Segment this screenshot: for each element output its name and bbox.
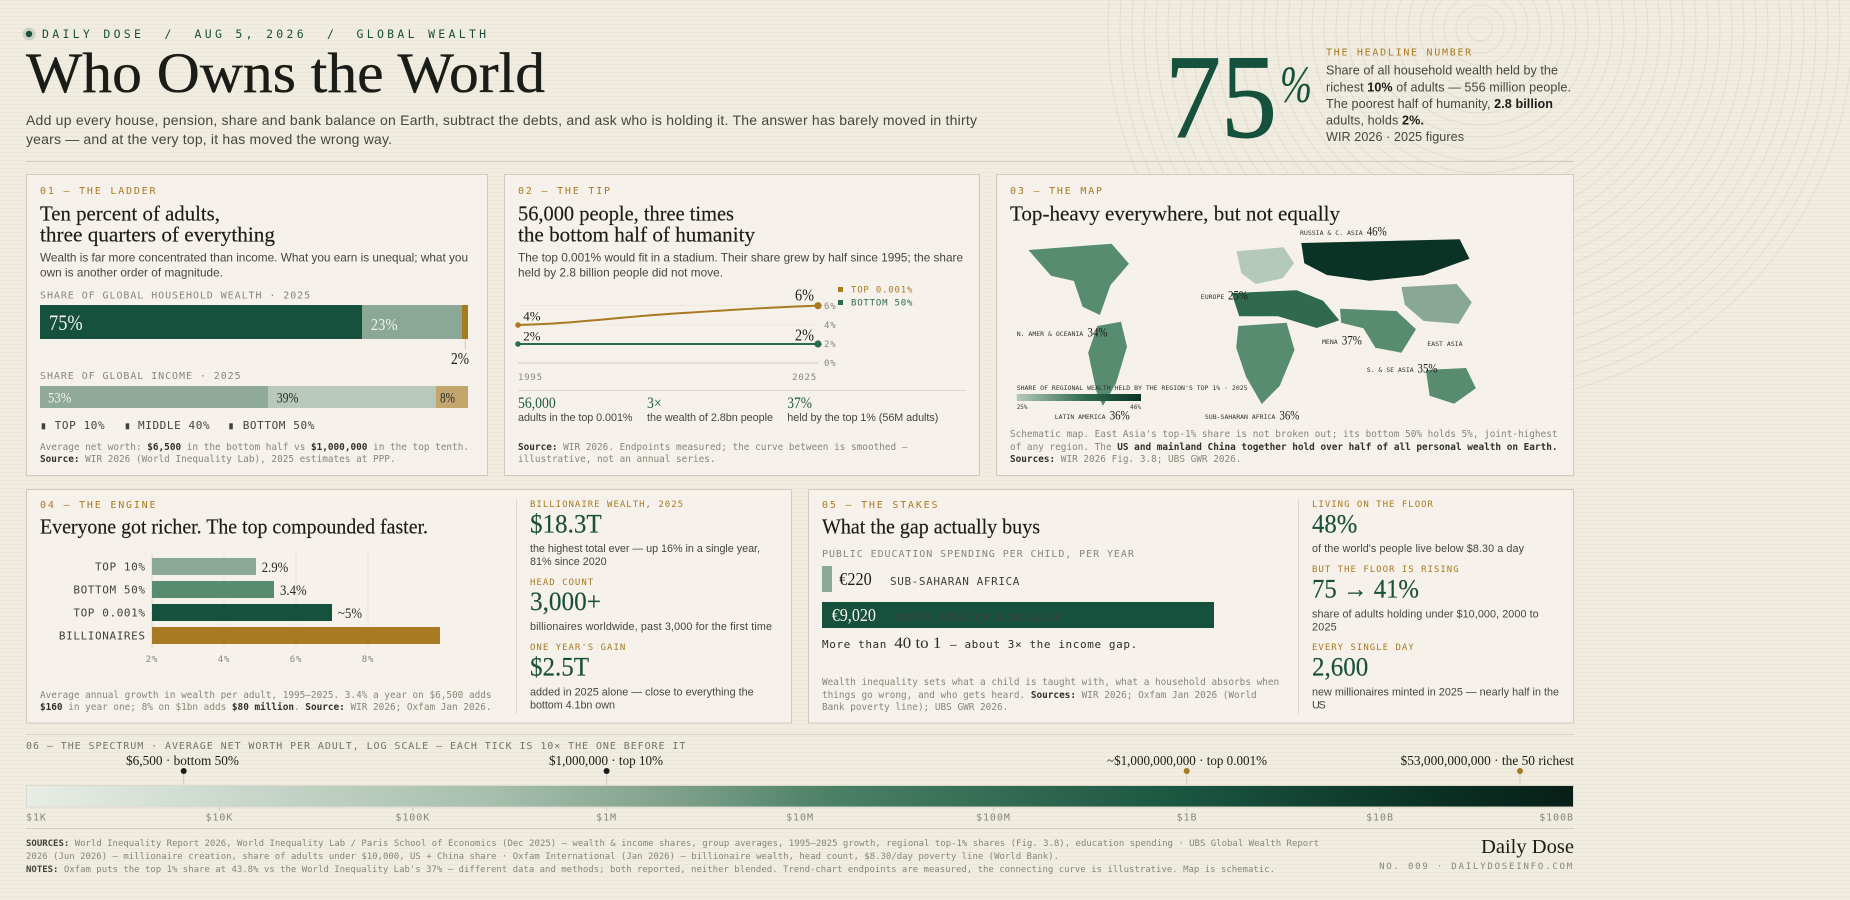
marker: top 10% [549, 753, 663, 785]
headline explanation: Share of all household wealth held by the [1326, 64, 1558, 78]
headline number 75%: 75 [1165, 30, 1277, 163]
marker: top 0.001% [1107, 753, 1267, 785]
intro text [26, 112, 977, 147]
stat: billionaire wealth [530, 500, 760, 568]
stat: one year's gain: added in 2025 alone — close to everything the [530, 687, 754, 699]
growth bar chart: 2.9% [262, 560, 288, 576]
map labels: 36% [1110, 407, 1130, 422]
education spending bars: SUB-SAHARAN AFRICA [890, 575, 1020, 588]
panel heading: the bottom half of humanity [518, 222, 756, 246]
sources and notes [26, 839, 1319, 875]
stat: one year's gain: bottom 4.1bn own [530, 699, 615, 711]
chart legend [838, 286, 913, 308]
stat: living on the floor: 48% [1312, 510, 1357, 539]
stat: head count: billionaires worldwide, past 3,000 for the first time [530, 621, 772, 633]
education spending bars: €220 [839, 569, 872, 589]
headline explanation: The poorest half of humanity, 2.8 billion [1326, 97, 1553, 111]
panel label: 05 — THE STAKES [822, 500, 939, 511]
panel heading [40, 202, 275, 246]
panel note: illustrative, not an annual series. [518, 454, 716, 465]
masthead eyebrow: / [327, 27, 337, 41]
scale ticks: $10K [205, 812, 233, 824]
stat: every single day: 2,600 [1312, 653, 1368, 682]
scale ticks: $100M [976, 812, 1011, 824]
scale ticks: $10B [1366, 812, 1394, 824]
panel: 01 the ladder [26, 174, 488, 476]
map labels: EUROPE [1201, 293, 1224, 301]
headline explanation [1326, 48, 1571, 144]
marker: bottom 50%: $6,500 · bottom 50% [126, 753, 239, 768]
stat: 56,000: 56,000 [518, 395, 556, 412]
stat: one year's gain: $2.5T [530, 653, 589, 682]
panel: 04 the engine [26, 490, 792, 723]
spectrum heading: 06 — THE SPECTRUM · AVERAGE NET WORTH PER ADULT, LOG SCALE — EACH TICK IS 10× THE ONE BEFORE IT [26, 741, 686, 752]
stat: every single day: EVERY SINGLE DAY [1312, 643, 1415, 653]
education spending bars [822, 566, 1214, 628]
headline explanation: richest 10% of adults — 556 million people. [1326, 80, 1571, 94]
stat: head count [530, 578, 772, 633]
line chart: top 0.001% vs bottom 50%: 4% [824, 321, 836, 331]
headline explanation: THE HEADLINE NUMBER [1326, 48, 1473, 58]
growth bar chart: TOP 0.001% [73, 606, 146, 620]
sources and notes: NOTES: Oxfam puts the top 1% share at 43.8% vs the World Inequality Lab's 37% — different data and methods; both reported, neither blended. Trend-chart endpoints are measured, the connecting curve is illustrative. Map is schematic. [26, 865, 1275, 875]
stat: 37%: 37% [787, 395, 812, 412]
gradient bar [26, 786, 1574, 807]
panel description: The top 0.001% would fit in a stadium. Their share grew by half since 1995; the share [518, 250, 963, 264]
scale ticks: $1M [596, 812, 617, 824]
line chart: top 0.001% vs bottom 50%: 2% [824, 340, 836, 350]
panel note [40, 690, 492, 713]
panel note: things go wrong, and who gets heard. Sources: WIR 2026; Oxfam Jan 2026 (World [822, 690, 1257, 701]
map labels: RUSSIA & C. ASIA [1300, 229, 1363, 237]
stat: 3x [647, 395, 773, 424]
growth bar chart [59, 554, 440, 665]
income share stacked bar [40, 386, 468, 408]
income share stacked bar: 8% [440, 390, 455, 406]
marker: top 10%: $1,000,000 · top 10% [549, 753, 663, 768]
sources and notes: SOURCES: World Inequality Report 2026, World Inequality Lab / Paris School of Economics (Dec 2025) — wealth & income shares, group averages, 1995–2025 growth, regional top-1% shares (Fig. 3.8), education spending · UBS Global Wealth Report [26, 839, 1319, 849]
stat: head count: HEAD COUNT [530, 578, 594, 588]
panel description: held by 2.8 billion people did not move. [518, 266, 723, 280]
marker: top 0.001%: ~$1,000,000,000 · top 0.001% [1107, 753, 1267, 768]
education spending bars: €9,020 [832, 605, 876, 625]
line chart: top 0.001% vs bottom 50% [515, 286, 836, 383]
income share stacked bar: 39% [277, 390, 298, 406]
line chart: top 0.001% vs bottom 50%: 2% [795, 326, 814, 345]
panel note: Source: WIR 2026. Endpoints measured; the curve between is smoothed — [518, 442, 908, 453]
wealth share stacked bar: 2% [451, 349, 469, 368]
masthead eyebrow: AUG 5, 2026 [194, 27, 307, 41]
map labels: 34% [1088, 324, 1108, 339]
panel label: 04 — THE ENGINE [40, 500, 157, 511]
masthead eyebrow: GLOBAL WEALTH [356, 27, 489, 41]
scale ticks: $1K [26, 812, 47, 824]
panel note: Wealth inequality sets what a child is taught with, what a household absorbs when [822, 677, 1279, 688]
map colour legend: SHARE OF REGIONAL WEALTH HELD BY THE REGION'S TOP 1% · 2025 [1017, 384, 1248, 392]
bar legend: BOTTOM 50% [243, 419, 315, 432]
stat: 56,000: adults in the top 0.001% [518, 412, 633, 424]
stat: living on the floor [1312, 500, 1525, 555]
footer brand: Daily Dose [1481, 836, 1574, 858]
stat: floor is rising [1312, 565, 1539, 633]
stat: billionaire wealth: 81% since 2020 [530, 556, 607, 568]
panel description: own is another order of magnitude. [40, 266, 223, 280]
panel note [518, 442, 908, 465]
map labels: S. & SE ASIA [1367, 366, 1414, 374]
stat: 3x: 3× [647, 395, 662, 412]
panel note: of any region. The US and mainland China together hold over half of all personal wealth on Earth. [1010, 442, 1558, 453]
stat: every single day [1312, 643, 1559, 711]
panel note: Schematic map. East Asia's top-1% share is not broken out; its bottom 50% holds 5%, joint-highest [1010, 429, 1558, 440]
title: Who Owns the World [26, 42, 545, 105]
line chart: top 0.001% vs bottom 50%: 6% [824, 302, 836, 312]
line chart: top 0.001% vs bottom 50%: 4% [523, 309, 541, 324]
stat: floor is rising: 2025 [1312, 621, 1337, 633]
map labels: 37% [1342, 332, 1362, 347]
stat: 3x: the wealth of 2.8bn people [647, 412, 773, 424]
map labels: 35% [1418, 360, 1438, 375]
growth bar chart: BILLIONAIRES [59, 630, 146, 642]
panel heading: 56,000 people, three times [518, 202, 734, 226]
panel note [1010, 429, 1558, 465]
intro text: Add up every house, pension, share and bank balance on Earth, subtract the debts, and ask who is holding it. The answer has barely moved in thirty [26, 112, 977, 128]
map labels: EAST ASIA [1427, 340, 1463, 348]
scale ticks: $10M [786, 812, 814, 824]
stat: living on the floor: LIVING ON THE FLOOR [1312, 500, 1434, 510]
panel heading [518, 202, 756, 246]
chart legend: TOP 0.001% [851, 286, 913, 296]
stat: floor is rising: share of adults holding under $10,000, 2000 to [1312, 609, 1539, 621]
growth bar chart: TOP 10% [95, 560, 146, 574]
marker: bottom 50% [126, 753, 239, 785]
masthead eyebrow: / [164, 27, 175, 41]
map colour legend: 25% [1017, 404, 1028, 411]
panel heading: Top-heavy everywhere, but not equally [1010, 202, 1340, 226]
growth bar chart: BOTTOM 50% [73, 584, 146, 596]
panel heading: Everyone got richer. The top compounded faster. [40, 514, 428, 538]
footer brand: NO. 009 · DAILYDOSEINFO.COM [1379, 862, 1574, 872]
education spending bars: NORTH AMERICA & OCEANIA [896, 611, 1062, 624]
map labels: MENA [1322, 338, 1338, 346]
map labels: 46% [1367, 223, 1387, 238]
stat: 37%: held by the top 1% (56M adults) [787, 412, 938, 424]
line chart: top 0.001% vs bottom 50%: 0% [824, 359, 836, 369]
scale ticks: $100B [1539, 812, 1574, 824]
panel label: 02 — THE TIP [518, 186, 612, 197]
education spending label: PUBLIC EDUCATION SPENDING PER CHILD, PER YEAR [822, 549, 1135, 560]
intro text: years — and at the very top, it has moved the wrong way. [26, 131, 392, 147]
ratio callout: — about 3× the income gap. [950, 638, 1138, 651]
footer brand [1379, 836, 1574, 872]
panel: 02 the tip [504, 174, 980, 476]
panel note: Sources: WIR 2026 Fig. 3.8; UBS GWR 2026. [1010, 454, 1241, 465]
panel heading: Ten percent of adults, [40, 202, 220, 226]
income bar label: SHARE OF GLOBAL INCOME · 2025 [40, 371, 242, 382]
marker: the 50 richest [1400, 753, 1574, 785]
stat: every single day: new millionaires minted in 2025 — nearly half in the [1312, 687, 1559, 699]
panel description [40, 250, 468, 280]
ratio callout: 40 to 1 [894, 635, 941, 652]
panel note: Bank poverty line); UBS GWR 2026. [822, 702, 1008, 713]
headline explanation: WIR 2026 · 2025 figures [1326, 130, 1464, 144]
panel note [822, 677, 1279, 713]
growth bar chart: 2% [146, 655, 158, 665]
panel note: Source: WIR 2026 (World Inequality Lab), 2025 estimates at PPP. [40, 454, 396, 465]
bar legend: MIDDLE 40% [138, 419, 210, 432]
schematic world map [1028, 239, 1476, 406]
stat: one year's gain: ONE YEAR'S GAIN [530, 643, 626, 653]
wealth share stacked bar [40, 305, 469, 368]
panel note: $160 in year one; 8% on $1bn adds $80 million. Source: WIR 2026; Oxfam Jan 2026. [40, 702, 492, 713]
panel description: Wealth is far more concentrated than income. What you earn is unequal; what you [40, 250, 468, 264]
bar legend [42, 419, 315, 432]
panel heading: three quarters of everything [40, 222, 275, 246]
scale ticks: $100K [395, 812, 430, 824]
stat: every single day: US [1312, 699, 1326, 711]
masthead eyebrow: DAILY DOSE [42, 27, 144, 41]
line chart: top 0.001% vs bottom 50%: 2025 [792, 373, 817, 383]
panel description [518, 250, 963, 280]
chart legend: BOTTOM 50% [851, 298, 913, 308]
headline explanation: adults, holds 2%. [1326, 114, 1424, 128]
growth bar chart: 4% [218, 655, 230, 665]
map colour legend [1017, 384, 1248, 411]
sources and notes: 2026 (Jun 2026) — millionaire creation, share of adults under $10,000, US + China share · Oxfam International (Jan 2026) — billionaire wealth, head count, $8.30/day poverty line (World Bank). [26, 852, 1059, 862]
panel note: Average net worth: $6,500 in the bottom half vs $1,000,000 in the top tenth. [40, 442, 469, 453]
map labels: 25% [1228, 287, 1248, 302]
panel: 05 the stakes [808, 490, 1574, 723]
bar legend: TOP 10% [55, 419, 105, 432]
line chart: top 0.001% vs bottom 50%: 2% [523, 329, 541, 344]
ratio callout: More than [822, 638, 887, 651]
map labels: N. AMER & OCEANIA [1017, 330, 1083, 338]
stat: billionaire wealth: $18.3T [530, 510, 602, 539]
map labels: LATIN AMERICA [1055, 413, 1106, 421]
map colour legend: 46% [1130, 404, 1141, 411]
scale ticks [26, 807, 1574, 824]
line chart: top 0.001% vs bottom 50%: 1995 [518, 373, 543, 383]
wealth share stacked bar: 23% [371, 315, 398, 334]
stat: billionaire wealth: the highest total ever — up 16% in a single year, [530, 543, 760, 555]
spectrum scale [26, 753, 1574, 824]
stat: floor is rising: BUT THE FLOOR IS RISING [1312, 565, 1460, 575]
stat: 56,000 [518, 395, 633, 424]
panel note: Average annual growth in wealth per adult, 1995–2025. 3.4% a year on $6,500 adds [40, 690, 492, 701]
stat: floor is rising: 75 → 41% [1312, 574, 1419, 603]
growth bar chart: 3.4% [280, 583, 307, 599]
wealth share stacked bar: 75% [49, 310, 83, 335]
stat: living on the floor: of the world's people live below $8.30 a day [1312, 543, 1525, 555]
line chart: top 0.001% vs bottom 50%: 6% [795, 286, 814, 305]
stat: billionaire wealth: BILLIONAIRE WEALTH, 2025 [530, 500, 684, 510]
panel note [40, 442, 469, 465]
marker: the 50 richest: $53,000,000,000 · the 50 richest [1400, 753, 1574, 768]
stat: head count: 3,000+ [530, 587, 601, 616]
income share stacked bar: 53% [48, 390, 71, 406]
panel label: 01 — THE LADDER [40, 186, 157, 197]
panel: 03 the map [996, 174, 1574, 476]
headline number 75%: % [1280, 57, 1312, 114]
panel label: 03 — THE MAP [1010, 186, 1104, 197]
panel heading: What the gap actually buys [822, 514, 1040, 538]
masthead eyebrow [22, 27, 489, 41]
map labels [1017, 223, 1463, 422]
scale ticks: $1B [1177, 812, 1197, 824]
stat: 37% [787, 395, 938, 424]
map labels: SUB-SAHARAN AFRICA [1205, 413, 1275, 421]
wealth bar label: SHARE OF GLOBAL HOUSEHOLD WEALTH · 2025 [40, 290, 311, 301]
growth bar chart: 6% [290, 655, 302, 665]
growth bar chart: 8% [362, 655, 374, 665]
stat: one year's gain [530, 643, 754, 711]
growth bar chart: ~5% [338, 606, 362, 622]
map labels: 36% [1279, 407, 1300, 422]
